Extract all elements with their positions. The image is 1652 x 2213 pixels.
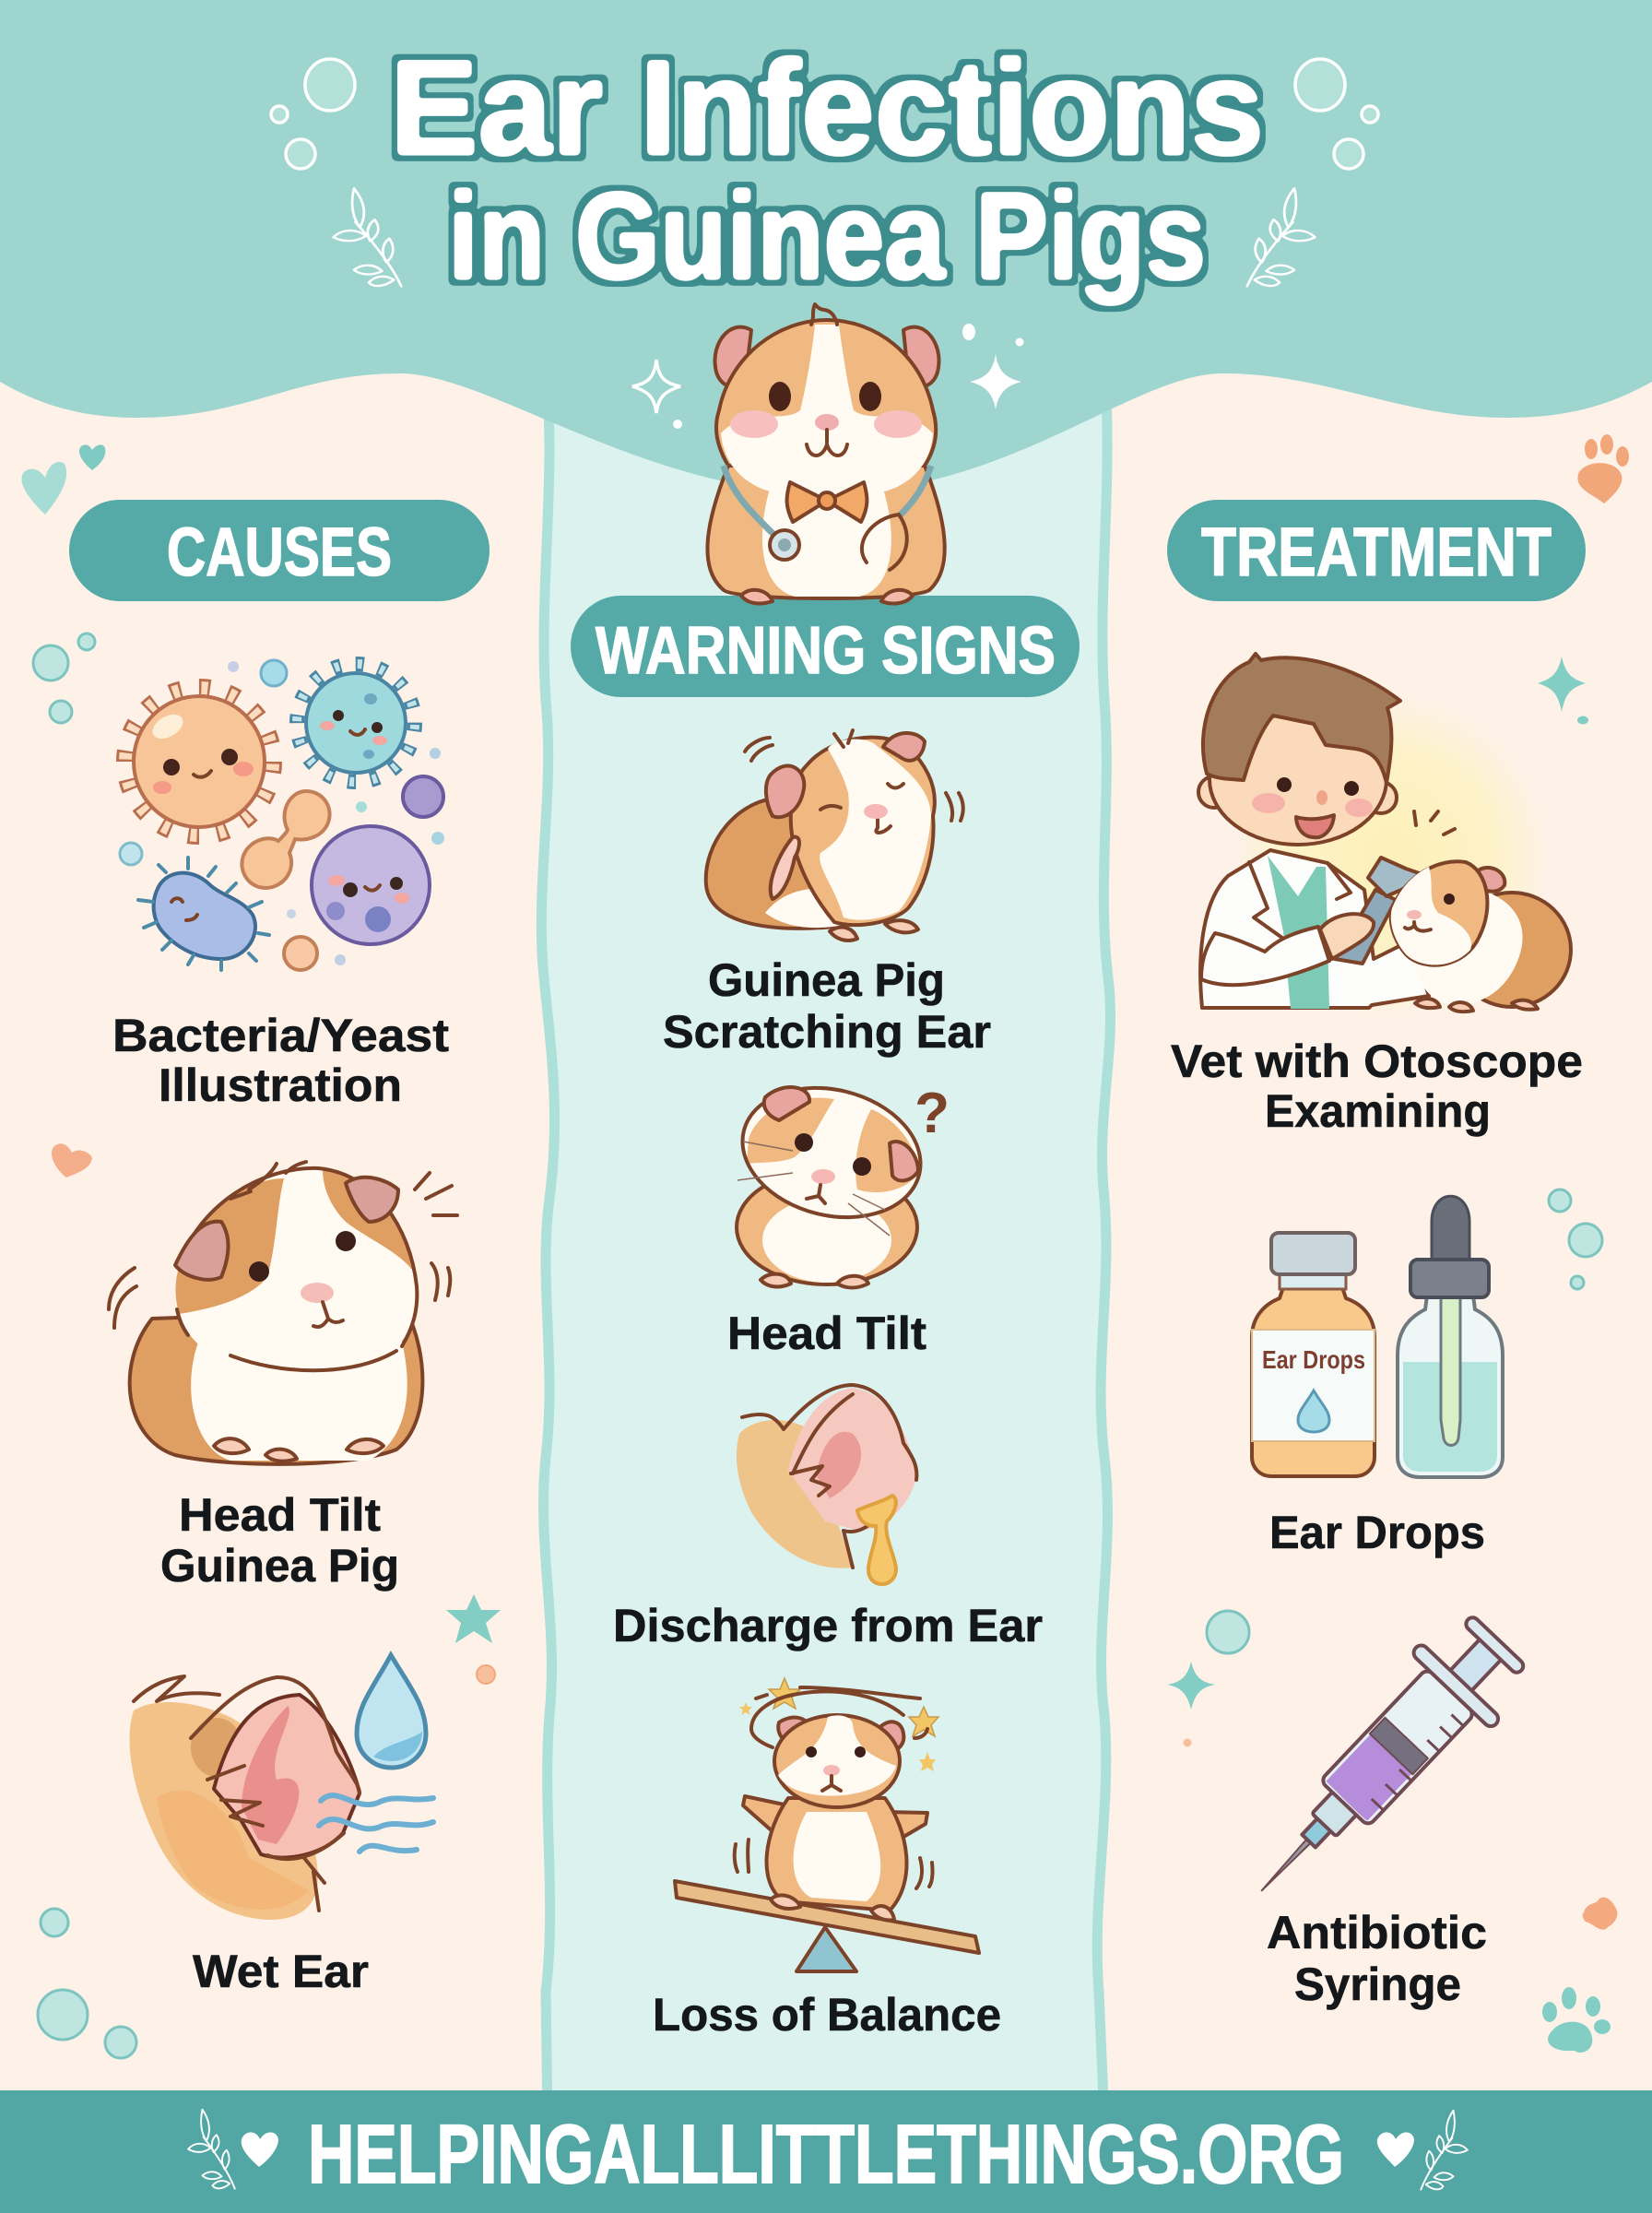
illustration: loss of balance guinea pig on seesaw [675,1678,979,1971]
illustration: head tilt sign [728,1070,950,1287]
label: antibiotic syringe: Syringe [1294,1959,1461,2010]
footer band: HELPINGALLLITTLETHINGS.ORG [308,2109,1344,2201]
title bubbles right [1295,59,1378,169]
pill: treatment [1167,500,1586,601]
footer band [0,2090,1652,2213]
label: head tilt guinea pig: Guinea Pig [160,1540,399,1592]
illustration: vet with otoscope [1198,654,1571,1019]
bubbles causes top [33,633,95,723]
illustration: bacteria and yeast [120,660,444,970]
icon: orange heart [52,1143,92,1178]
header band [0,0,1652,493]
illustration: ear drop bottles [1252,1196,1503,1477]
label: ear drops: Ear Drops [1269,1507,1485,1558]
icon: sparkle near syringe [1167,1662,1215,1746]
sparkle outlined [632,360,680,413]
sparkle filled [970,354,1021,409]
label: antibiotic syringe: Antibiotic [1267,1907,1487,1959]
pill: warning signs [571,596,1080,697]
icon: star [446,1594,501,1643]
illustration: head tilt guinea pig [109,1162,457,1464]
illustration: discharge from ear [737,1385,916,1584]
label: wet ear: Wet Ear [193,1946,369,1997]
icon: orange dot [477,1665,495,1684]
pill: causes: CAUSES [167,514,392,590]
title [390,32,1264,305]
label: head tilt sign: Head Tilt [727,1308,926,1359]
bubbles treatment [1549,1189,1602,1289]
label: bacteria yeast: Bacteria/Yeast [112,1010,449,1061]
label: head tilt guinea pig: Head Tilt [179,1489,381,1541]
label: guinea pig scratching ear: Scratching Ear [663,1006,991,1058]
laurel right [1247,188,1315,286]
panel: warning signs column [541,369,1110,2121]
illustration: antibiotic syringe [1221,1603,1540,1929]
label: bacteria yeast [112,1010,449,1111]
mascot guinea pig with stethoscope [707,304,945,603]
title: in Guinea Pigs [448,168,1206,305]
pill: treatment: TREATMENT [1201,514,1552,590]
pill: causes [69,500,490,601]
title: Ear Infections [390,32,1264,183]
bubbles bottom left [38,1909,136,2058]
label: guinea pig scratching ear: Guinea Pig [708,954,945,1006]
label: head tilt guinea pig [160,1489,399,1592]
illustration: wet ear [130,1655,433,1920]
label: antibiotic syringe [1267,1907,1487,2010]
label: loss of balance: Loss of Balance [653,1989,1001,2041]
illustration: guinea pig scratching ear [706,730,963,941]
icon: teal paw [1542,1987,1611,2053]
sparkle dots [673,324,1023,429]
label: bacteria yeast: Illustration [159,1059,402,1111]
label: vet with otoscope: Examining [1265,1085,1491,1137]
footer heart left [242,2132,278,2167]
label: vet with otoscope [1171,1035,1583,1137]
footer sprig right [1421,2111,1468,2190]
illustration: head tilt sign: ? [914,1082,950,1145]
icon: hearts top left [21,444,105,515]
icon: paw top right [1577,434,1629,503]
pill: warning signs: WARNING SIGNS [596,614,1056,688]
label: guinea pig scratching ear [663,954,991,1058]
label: discharge from ear: Discharge from Ear [613,1600,1043,1651]
icon: sparkle treatment [1538,657,1588,725]
footer heart right [1377,2132,1414,2167]
label: vet with otoscope: Vet with Otoscope [1171,1035,1583,1087]
bubble near syringe [1207,1611,1249,1653]
laurel left [334,188,401,286]
footer sprig left [188,2110,235,2189]
illustration: ear drop bottles: Ear Drops [1262,1345,1365,1374]
title bubbles left [271,59,355,169]
icon: orange blob [1583,1898,1617,1930]
